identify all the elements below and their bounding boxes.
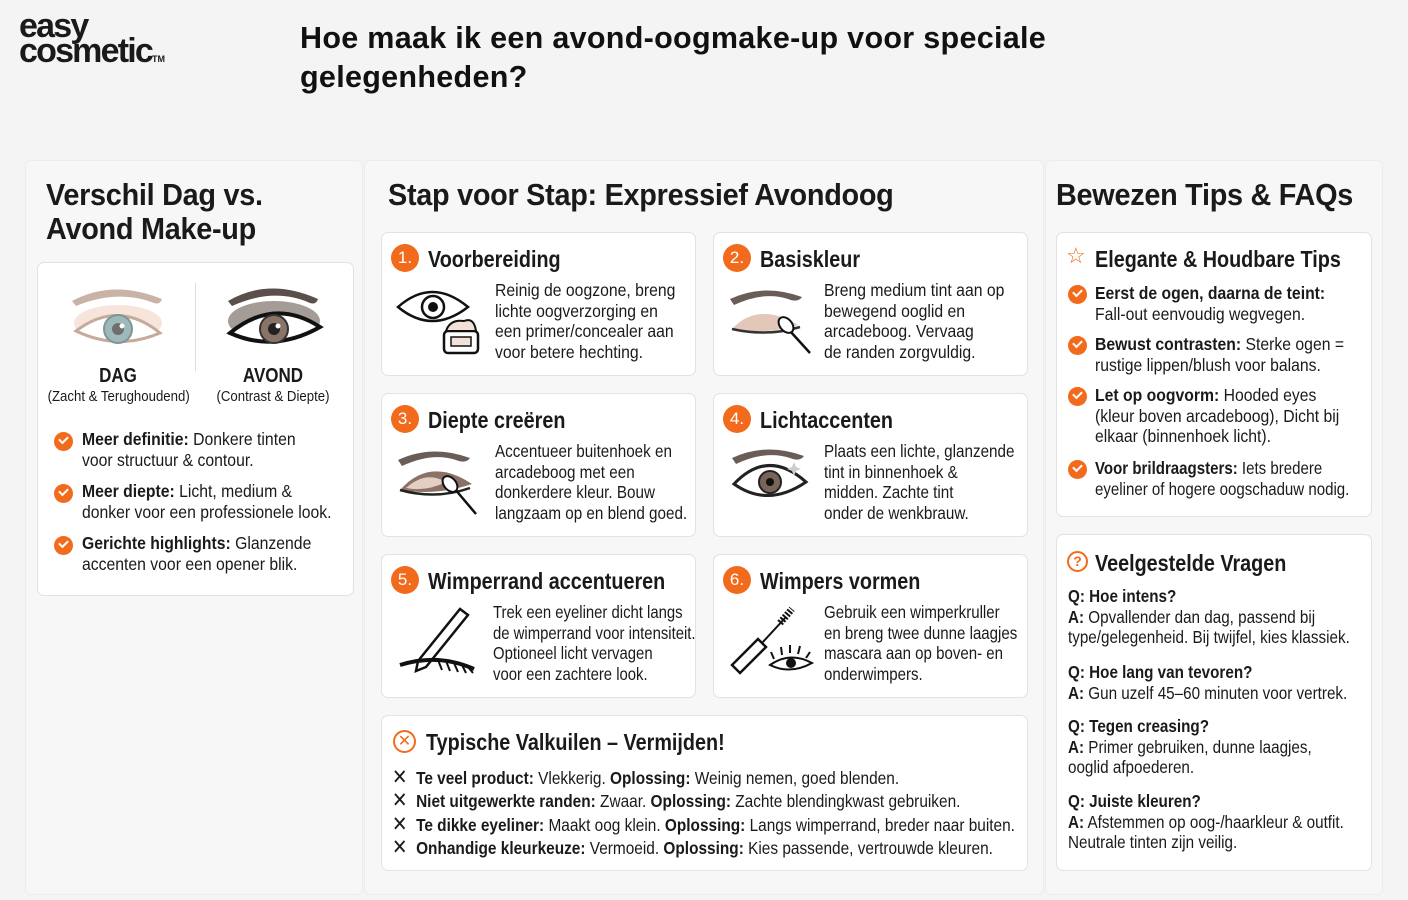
- icon: eyeliner pencil: [399, 607, 475, 674]
- card: step 1: een primer/concealer aan: [495, 321, 674, 341]
- card: faq: Q: Hoe intens?: [1068, 586, 1176, 606]
- label: dag: [48, 365, 190, 405]
- card: step 2: bewegend ooglid en: [824, 301, 965, 321]
- card: faq: type/gelegenheid. Bij twijfel, kies klassiek.: [1068, 627, 1350, 647]
- card: step 4: 4.: [730, 409, 744, 428]
- card: step 1: lichte oogverzorging en: [495, 301, 658, 321]
- card: faq: Q: Tegen creasing?: [1068, 716, 1209, 736]
- card: step 6: Gebruik een wimperkruller: [824, 602, 1000, 622]
- card: tips: Let op oogvorm: Hooded eyes: [1095, 385, 1316, 405]
- card: step 5: Optioneel licht vervagen: [493, 643, 653, 663]
- card: step 5: 5.: [398, 570, 412, 589]
- card: tips: eyeliner of hogere oogschaduw nodig.: [1095, 479, 1349, 499]
- logo: cosmeticTM: [19, 32, 165, 70]
- label: avond: AVOND: [243, 365, 303, 387]
- card: step 2: Basiskleur: [760, 246, 860, 272]
- card: tips: rustige lippen/blush voor balans.: [1095, 355, 1321, 375]
- card: faq: Q: Hoe lang van tevoren?: [1068, 662, 1252, 682]
- title: Hoe maak ik een avond-oogmake-up voor speciale: [300, 21, 1046, 55]
- icon: x circle: [393, 730, 416, 753]
- panel: right column: [1045, 160, 1383, 895]
- icon: day eye: [72, 290, 163, 344]
- icon: star: ☆: [1066, 243, 1086, 268]
- card: pitfalls: Typische Valkuilen – Vermijden!: [426, 729, 725, 755]
- card: step 3: langzaam op en blend goed.: [495, 503, 687, 523]
- icon: lid with brush: [730, 290, 811, 354]
- icon: deep lid: [398, 452, 477, 515]
- label: dag: (Zacht & Terughoudend): [48, 388, 190, 405]
- card: step 4: midden. Zachte tint: [824, 482, 953, 502]
- card: step 6: en breng twee dunne laagjes: [824, 623, 1017, 643]
- card: step 5: de wimperrand voor intensiteit.: [493, 623, 696, 643]
- card: step 4: onder de wenkbrauw.: [824, 503, 969, 523]
- heading: verschil: [46, 177, 263, 246]
- list: pitfalls: [392, 766, 1015, 859]
- card: step 6: Wimpers vormen: [760, 568, 920, 594]
- label: dag: DAG: [99, 365, 137, 387]
- card: step 1: [381, 232, 696, 376]
- card: step 5: voor een zachtere look.: [493, 664, 648, 684]
- list: pitfalls: ✕ Te veel product: Vlekkerig. Oplossing: Weinig nemen, goed blenden.: [392, 766, 899, 789]
- card: faq: [1056, 534, 1372, 871]
- card: step 2: [713, 232, 1028, 376]
- card: step 3: Accentueer buitenhoek en: [495, 441, 672, 461]
- card: step 2: 2.: [730, 248, 744, 267]
- panel: day vs evening card: [37, 262, 354, 596]
- card: step 2: arcadeboog. Vervaag: [824, 321, 974, 341]
- card: step 3: donkerdere kleur. Bouw: [495, 482, 655, 502]
- card: faq: A: Gun uzelf 45–60 minuten voor vertrek.: [1068, 683, 1347, 703]
- icon: evening eye: [226, 288, 324, 344]
- card: step 5: Trek een eyeliner dicht langs: [493, 602, 683, 622]
- list: pitfalls: ✕ Te dikke eyeliner: Maakt oog klein. Oplossing: Langs wimperrand, breder naar buiten.: [392, 813, 1015, 836]
- list: pitfalls: ✕ Niet uitgewerkte randen: Zwaar. Oplossing: Zachte blendingkwast gebruiken.: [392, 789, 960, 812]
- card: step 4: tint in binnenhoek &: [824, 462, 958, 482]
- card: step 1: Reinig de oogzone, breng: [495, 280, 675, 300]
- list: differences: Meer diepte: Licht, medium &: [82, 481, 292, 501]
- list: differences: voor structuur & contour.: [82, 450, 254, 470]
- card: step 1: voor betere hechting.: [495, 342, 643, 362]
- card: tips: Elegante & Houdbare Tips: [1095, 246, 1341, 272]
- card: step 6: [713, 554, 1028, 698]
- list: differences: Gerichte highlights: Glanzende: [82, 533, 311, 553]
- title: [300, 21, 1046, 94]
- logo: [19, 7, 165, 70]
- panel: middle column: [364, 160, 1044, 895]
- card: step 4: [713, 393, 1028, 537]
- list: differences: donker voor een professionele look.: [82, 502, 332, 522]
- card: faq: A: Primer gebruiken, dunne laagjes,: [1068, 737, 1312, 757]
- title: gelegenheden?: [300, 60, 528, 94]
- logo: easy: [19, 7, 87, 45]
- card: faq: Neutrale tinten zijn veilig.: [1068, 832, 1237, 852]
- card: step 6: mascara aan op boven- en: [824, 643, 1003, 663]
- card: faq: Q: Juiste kleuren?: [1068, 791, 1201, 811]
- list: differences: [54, 429, 332, 574]
- list: pitfalls: ✕ Onhandige kleurkeuze: Vermoeid. Oplossing: Kies passende, vertrouwde kleuren.: [392, 836, 993, 859]
- heading: stap voor stap: Stap voor Stap: Expressief Avondoog: [388, 177, 894, 212]
- card: faq: A: Opvallender dan dag, passend bij: [1068, 607, 1315, 627]
- card: step 3: Diepte creëren: [428, 407, 565, 433]
- heading: verschil: Verschil Dag vs.: [46, 177, 263, 212]
- card: step 3: 3.: [398, 409, 412, 428]
- card: step 5: [381, 554, 696, 698]
- icon: eye and jar: [396, 290, 480, 354]
- list: differences: accenten voor een opener blik.: [82, 554, 297, 574]
- icon: highlighted eye: [732, 450, 808, 497]
- card: step 2: Breng medium tint aan op: [824, 280, 1004, 300]
- card: tips: [1056, 232, 1372, 517]
- icon: mascara: [730, 606, 814, 675]
- card: step 6: onderwimpers.: [824, 664, 923, 684]
- card: step 4: Plaats een lichte, glanzende: [824, 441, 1014, 461]
- card: tips: Bewust contrasten: Sterke ogen =: [1095, 334, 1344, 354]
- card: step 4: Lichtaccenten: [760, 407, 893, 433]
- icon: x circle: ✕: [398, 733, 411, 750]
- card: step 5: Wimperrand accentueren: [428, 568, 665, 594]
- card: step 6: 6.: [730, 570, 744, 589]
- card: step 2: de randen zorgvuldig.: [824, 342, 975, 362]
- icon: question: [1067, 551, 1088, 572]
- card: faq: Veelgestelde Vragen: [1095, 550, 1286, 576]
- heading: verschil: Avond Make-up: [46, 211, 256, 246]
- card: pitfalls: [381, 715, 1028, 871]
- card: step 3: arcadeboog met een: [495, 462, 635, 482]
- card: step 1: Voorbereiding: [428, 246, 561, 272]
- card: faq: A: Afstemmen op oog-/haarkleur & outfit.: [1068, 812, 1344, 832]
- card: tips: Eerst de ogen, daarna de teint:: [1095, 283, 1325, 303]
- card: tips: (kleur boven arcadeboog), Dicht bij: [1095, 406, 1339, 426]
- card: tips: Fall-out eenvoudig wegvegen.: [1095, 304, 1305, 324]
- card: step 1: 1.: [398, 248, 412, 267]
- heading: tips: Bewezen Tips & FAQs: [1056, 177, 1353, 212]
- card: faq: ooglid afpoederen.: [1068, 757, 1194, 777]
- card: tips: Voor brildraagsters: Iets bredere: [1095, 458, 1322, 478]
- label: avond: [217, 365, 329, 405]
- panel: left column: [25, 160, 363, 895]
- icon: question: ?: [1073, 553, 1082, 569]
- list: differences: Meer definitie: Donkere tinten: [82, 429, 296, 449]
- card: tips: elkaar (binnenhoek licht).: [1095, 426, 1271, 446]
- label: avond: (Contrast & Diepte): [217, 388, 329, 405]
- card: step 3: [381, 393, 696, 537]
